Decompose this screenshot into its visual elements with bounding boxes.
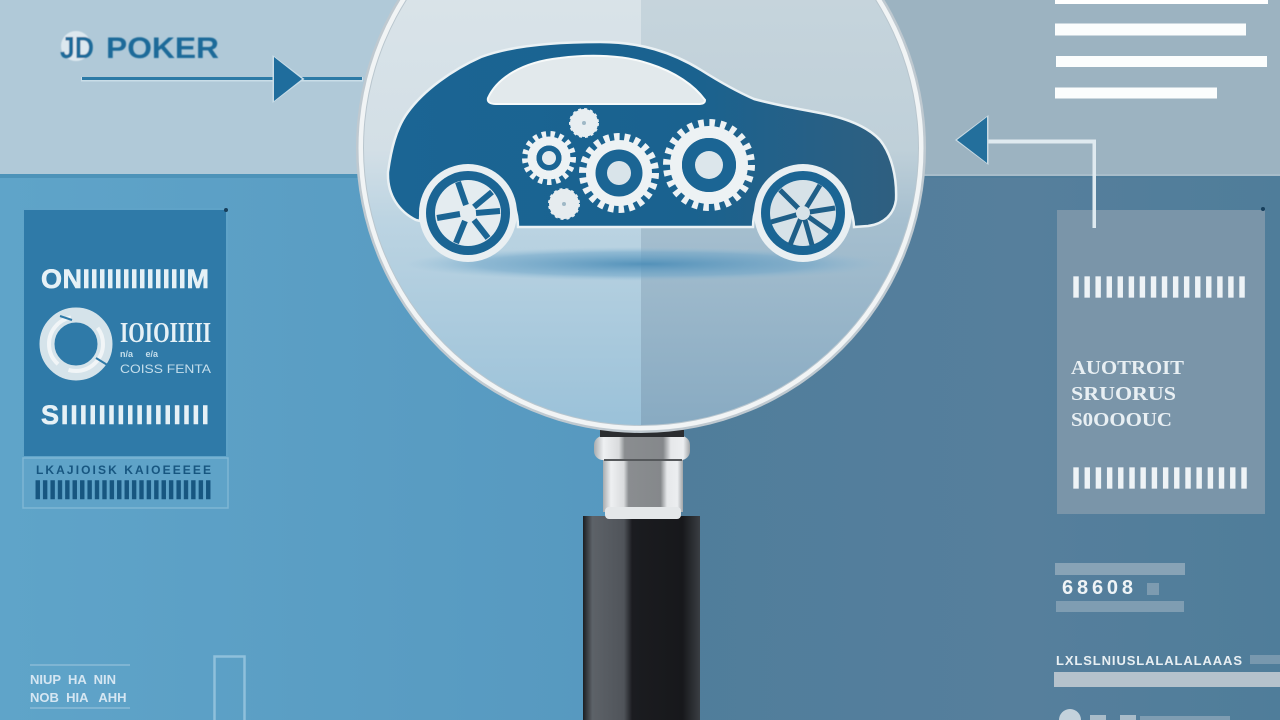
handle: metal neck [603, 458, 683, 512]
car body [388, 42, 896, 227]
text: right card paragraph line three: S0OOOUC [1071, 409, 1172, 431]
text: bottom-left small labels: NIUP HA NIN [30, 672, 116, 687]
gear: right [667, 123, 751, 207]
text: right card bottom bars: IIIIIIIIIIIIIIII [1072, 463, 1248, 495]
gear: small top [570, 109, 598, 137]
box: bottom-left outlined rectangle [214, 656, 244, 720]
magnifier lens [356, 0, 926, 440]
text: right card paragraph line two: SRUORUS [1071, 383, 1176, 405]
gear: centre [583, 137, 655, 209]
text: left card footer heading: SIIIIIIIIIIIIIIII [41, 400, 209, 430]
wheel: rear [419, 164, 517, 262]
stat block: bottom-right legend row [1059, 709, 1230, 720]
text: right card paragraph line one: AUOTROIT [1071, 357, 1185, 379]
text: right card top bars: IIIIIIIIIIIIIIII [1072, 272, 1246, 304]
panel: left info card [23, 208, 228, 458]
wheel: front [754, 164, 852, 262]
lens: outer ring [356, 0, 926, 433]
text: barcode strip label: LKAJIOISK KAIOEEEEE [36, 463, 211, 477]
handle: black grip [583, 516, 700, 720]
icon: ring chart [47, 315, 109, 373]
text: barcode strip bars: IIIIIIIIIIIIIIIIIIIIIIII [34, 475, 212, 505]
gear: small bottom [549, 189, 579, 219]
icon: car [388, 42, 896, 262]
stat block: lower right caption and bar [1054, 653, 1280, 687]
text: bottom-left small labels [30, 664, 130, 709]
handle: metal collar [594, 436, 690, 460]
logo: JD POKER: POKER [106, 32, 219, 65]
panel: left barcode strip [23, 458, 228, 508]
text: left card heading: ONIIIIIIIIIIIIIM [41, 264, 209, 294]
logo: JD POKER [60, 30, 219, 65]
panel: right info card [1057, 205, 1265, 514]
text: ring chart caption line one: n/a e/a [120, 349, 159, 359]
text: bottom-left small labels: NOB HIA AHH [30, 690, 127, 705]
list: top-right white lines [1055, 0, 1268, 98]
gear: left [525, 134, 573, 182]
logo: JD POKER: JD [60, 30, 94, 65]
stat block: lower right number: 68608 [1062, 577, 1133, 599]
text: ring chart title: IOIOIIIII [120, 318, 211, 349]
arrow: right card to magnifier [955, 115, 1096, 228]
magnifier handle [583, 430, 700, 720]
lens: glass [360, 0, 922, 440]
arrow: logo to magnifier [81, 55, 363, 103]
stat block: lower right number [1055, 563, 1185, 612]
text: ring chart caption line two: COISS FENTA [120, 362, 211, 376]
stat block: lower right caption and bar: LXLSLNIUSLALALALAAAS [1056, 653, 1242, 668]
car window [488, 56, 705, 104]
